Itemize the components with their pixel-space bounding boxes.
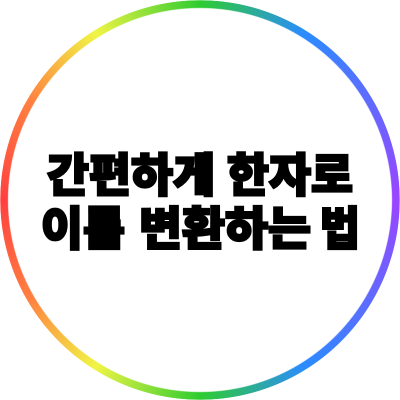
title: 이름 xyxy=(41,203,125,255)
title: 법 xyxy=(320,203,360,255)
title: 변환하는 xyxy=(139,203,311,255)
title: 간편하게 xyxy=(47,150,215,202)
title: 한자로 xyxy=(227,150,353,202)
